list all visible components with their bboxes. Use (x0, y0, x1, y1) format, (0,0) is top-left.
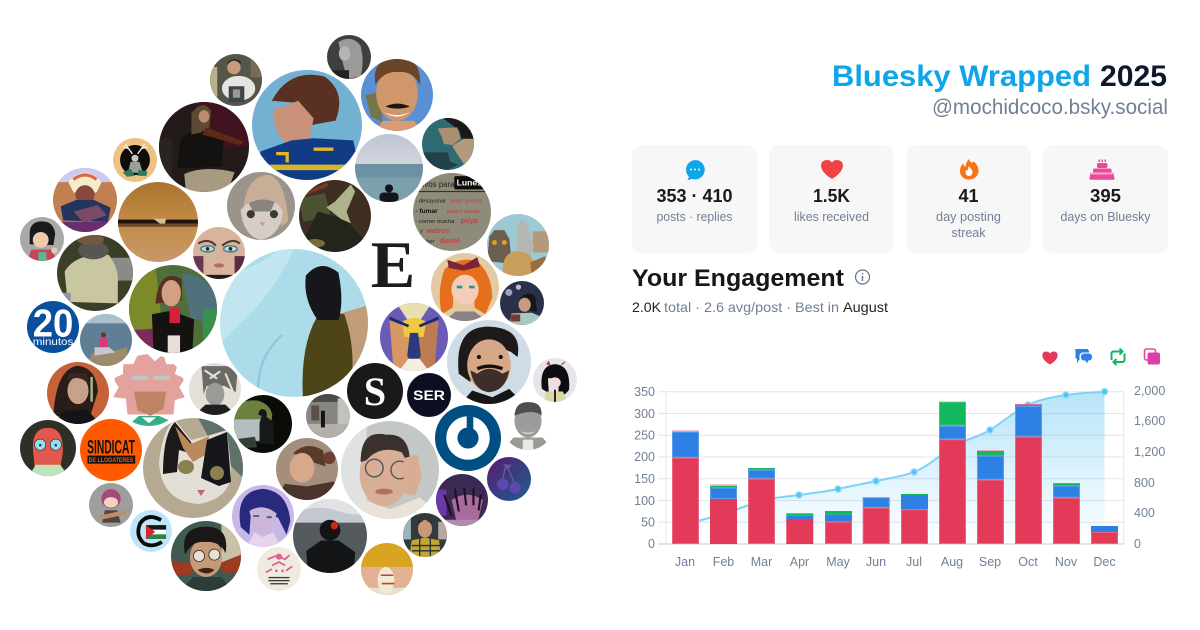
avatar: cat in towel hat (227, 172, 295, 240)
avatar: Lunes list meme: - fumar (415, 208, 438, 215)
handle: @mochidcoco.bsky.social (932, 96, 1168, 119)
month labels: Jun (866, 555, 886, 569)
month labels (675, 555, 1116, 569)
avatar: S logo: S (364, 369, 386, 414)
right axis labels: 800 (1134, 476, 1155, 490)
chart legend (1042, 348, 1160, 365)
avatar: red alien character (20, 420, 76, 476)
icon: cake (1090, 160, 1114, 180)
avatar: Lunes list meme: tabaco barato (447, 209, 480, 215)
avatar: deer illustration (113, 138, 157, 182)
icon: legend replies (1075, 349, 1092, 364)
bar: Nov (1053, 483, 1080, 544)
right axis labels: 1,200 (1134, 445, 1165, 459)
month labels: Feb (713, 555, 734, 569)
title: Bluesky Wrapped (832, 60, 1091, 93)
avatar: SER logo (407, 373, 451, 417)
bar: Dec (1091, 526, 1118, 544)
avatar: Lunes list meme: - comer mucha (415, 219, 455, 225)
bar: Aug (939, 402, 966, 544)
month labels: Apr (790, 555, 809, 569)
month labels: Aug (941, 555, 963, 569)
avatar: person facing sea with red flower (293, 499, 367, 573)
icon: legend quotes (1144, 349, 1160, 364)
avatar: Lunes list meme: tetas gordas (450, 199, 483, 205)
avatar: blue ring logo (435, 405, 501, 471)
avatar: Lunes list meme: - desayunar (415, 199, 446, 205)
bar: Oct (1015, 404, 1042, 544)
panel: likes received: likes received (794, 209, 869, 224)
avatar: man in plaid shirt (403, 513, 447, 557)
left axis labels: 300 (634, 407, 655, 421)
avatar: cherries (487, 457, 531, 501)
avatar: pink-haired figurine (89, 483, 133, 527)
bar: Jun (863, 497, 890, 544)
avatar: hands around a mug (361, 543, 413, 595)
avatar: person on rocks by the sea (80, 314, 132, 366)
avatar: goth anime character (533, 358, 577, 402)
engagement summary: total · 2.6 avg/post · Best in (664, 299, 839, 315)
right axis labels (1134, 384, 1165, 551)
panel: likes received (769, 145, 894, 253)
avatar: violinist (159, 102, 249, 192)
avatar: man with book (210, 54, 262, 106)
cumulative area (685, 392, 1104, 544)
icon: legend heart (1042, 352, 1058, 364)
avatar: drawn man with glasses (171, 521, 241, 591)
bar: Jul (901, 494, 928, 544)
avatar: Lunes list meme: Lunes (457, 177, 482, 187)
avatar: silhouette in a cave (234, 395, 292, 453)
avatar: redhead pixel art (431, 253, 499, 321)
avatar: Lunes list meme: diesel (440, 238, 459, 245)
avatar: Lunes list meme: poya (461, 216, 479, 225)
avatar: woman reading (500, 281, 544, 325)
avatar: Lunes list meme: jetivos para (414, 180, 455, 189)
avatar: Lunes list meme: webos (425, 226, 449, 235)
avatar: newspaper E logo (372, 243, 412, 287)
avatar: Lunes list meme: ber (426, 239, 435, 245)
avatar: smiling man with moustache (361, 57, 433, 131)
left axis labels: 0 (648, 537, 655, 551)
bar: Jan (672, 430, 699, 544)
panel: days on Bluesky (1043, 145, 1168, 253)
panel: posts and replies: 353 · 410 (656, 186, 732, 206)
avatar: S logo (347, 363, 403, 419)
icon: legend reposts (1112, 348, 1124, 365)
panel: days on Bluesky: days on Bluesky (1060, 209, 1151, 224)
heading: Your Engagement: Your Engagement (632, 265, 844, 292)
left axis labels: 150 (634, 472, 655, 486)
avatar cluster (20, 35, 577, 595)
bar: Apr (786, 513, 813, 544)
right axis labels: 400 (1134, 506, 1155, 520)
avatar: woman with teal glasses (193, 227, 245, 279)
month labels: Jan (675, 555, 695, 569)
avatar: smiling man with moustache, dark curls (447, 320, 531, 404)
avatar: large woman from behind on pale wall (220, 249, 368, 397)
avatar: person in arched hall (306, 394, 350, 438)
bar: May (825, 511, 852, 544)
avatar: orange sunset with insect (118, 182, 198, 262)
left axis labels: 100 (634, 494, 655, 508)
right axis labels: 0 (1134, 537, 1141, 551)
avatar: cat, seagull and dog (487, 214, 549, 276)
left axis labels (634, 385, 655, 551)
left axis labels: 50 (641, 516, 655, 530)
panel: day posting streak (906, 145, 1031, 253)
avatar: Lunes list meme: y (420, 228, 423, 234)
left axis labels: 350 (634, 385, 655, 399)
avatar: Lunes list meme (413, 173, 491, 251)
avatar: 20 minutos logo (27, 301, 79, 353)
title: 2025 (1100, 60, 1167, 93)
avatar: Sindicat de Llogateres logo (80, 419, 142, 481)
engagement summary: August (843, 299, 888, 315)
month labels: Sep (979, 555, 1001, 569)
month labels: Nov (1055, 555, 1078, 569)
avatar: person looking at sea (355, 134, 423, 202)
right axis labels: 2,000 (1134, 384, 1165, 398)
avatar: anime character arms crossed (53, 168, 117, 232)
avatar: 20 minutos logo: 20 (33, 302, 73, 345)
panel: likes received: 1.5K (813, 186, 850, 206)
avatar: purple sketch face (436, 474, 488, 526)
grid lines (658, 392, 1124, 544)
avatar: moth character (380, 303, 448, 371)
month labels: Jul (906, 555, 922, 569)
avatar: horse head painting (299, 180, 371, 252)
cumulative line (685, 392, 1104, 524)
avatar: painted girl (47, 362, 109, 424)
avatar: sheep in sweater (57, 234, 133, 311)
icon: info (856, 270, 870, 284)
avatar: Sindicat de Llogateres logo: DE LLOGATERES (89, 457, 134, 464)
icon: flame (960, 159, 978, 180)
line points (796, 389, 1108, 498)
chart: monthly engagement stacked bars with cumulative line (634, 384, 1165, 569)
avatar: SER logo: SER (413, 388, 445, 403)
bar: Sep (977, 450, 1004, 544)
engagement summary: 2.0K (632, 299, 662, 315)
panel: day posting streak: 41 (958, 186, 979, 206)
avatar: C with Palestinian flag (130, 510, 172, 552)
avatar: Sindicat de Llogateres logo: SINDICAT (87, 438, 135, 459)
bar: Mar (748, 468, 775, 544)
avatar: newspaper E logo: E (371, 229, 415, 302)
month labels: Dec (1093, 555, 1116, 569)
month labels: May (826, 555, 851, 569)
icon: heart (821, 160, 843, 179)
avatar: bald man with art behind (189, 363, 241, 415)
avatar: calico cat (143, 418, 243, 518)
panel: posts and replies (632, 145, 757, 253)
panel: day posting streak: streak (952, 225, 986, 240)
engagement summary (632, 299, 888, 315)
month labels: Oct (1018, 555, 1038, 569)
avatar: mirror selfie on graffiti (129, 265, 217, 353)
panel: days on Bluesky: 395 (1090, 186, 1121, 206)
avatar: girl with headphones drawing (20, 217, 64, 261)
avatar: blue-haired elf (232, 485, 294, 547)
avatar: grey-haired man (510, 402, 546, 450)
avatar: teal painting (422, 118, 474, 170)
avatar: smiling woman with bun (276, 438, 338, 500)
avatar: 20 minutos logo: minutos (33, 337, 73, 348)
avatar: black and white portrait (327, 35, 371, 79)
panel: posts and replies: posts · replies (656, 209, 733, 224)
avatar: profile with Boca shirt (252, 70, 362, 180)
right axis labels: 1,600 (1134, 414, 1165, 428)
avatar: man with glasses resting head (341, 421, 439, 519)
month labels: Mar (751, 555, 772, 569)
avatar: pink doodle poster (257, 547, 301, 591)
avatar: pink spiky hair character (113, 354, 185, 426)
bar: Feb (710, 484, 737, 544)
left axis labels: 200 (634, 450, 655, 464)
left axis labels: 250 (634, 428, 655, 442)
panel: day posting streak: day posting (936, 209, 1001, 224)
icon: speech bubble (686, 160, 705, 180)
